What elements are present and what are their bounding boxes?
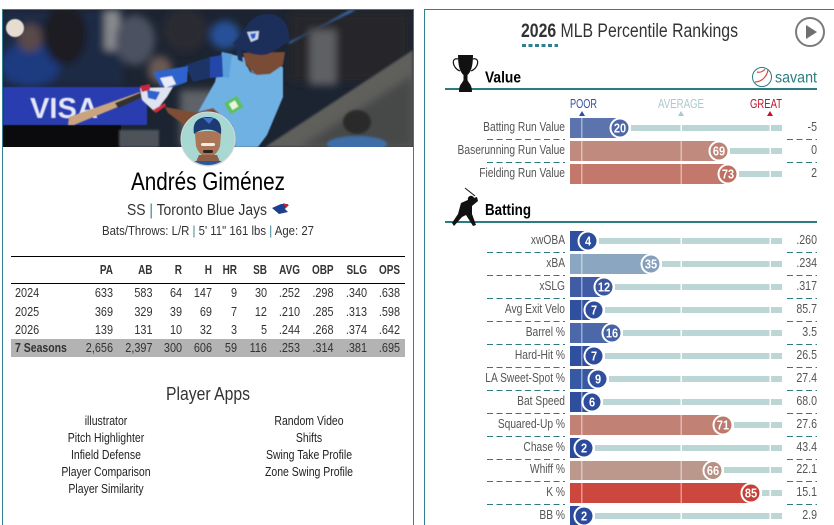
- row 2025: 69: [200, 305, 212, 319]
- savant logo: [752, 68, 817, 86]
- row 2025: 2025: [15, 305, 40, 319]
- player apps left links: illustrator: [85, 415, 127, 428]
- sign: [3, 125, 121, 147]
- row 2025: .285: [312, 305, 334, 319]
- row 2026: 32: [200, 323, 212, 337]
- row 7 seasons: [15, 341, 401, 355]
- row 2025: 12: [255, 305, 267, 319]
- row 7 seasons: .695: [379, 341, 401, 355]
- title dotted underline: [522, 44, 558, 47]
- rankings title: 2026 MLB Percentile Rankings: [521, 21, 738, 42]
- row: xwOBA: .260: [796, 233, 817, 247]
- head and helmet: [243, 52, 285, 75]
- row: Baserunning Run Value: Baserunning Run Value: [458, 144, 565, 157]
- row 2025: .313: [346, 305, 367, 319]
- row: Fielding Run Value: [479, 164, 817, 184]
- row: xSLG: .317: [796, 279, 817, 293]
- row: Fielding Run Value: 2: [811, 166, 817, 180]
- table header: R: [175, 264, 182, 277]
- row: K %: 15.1: [796, 485, 817, 499]
- row 2026: 3: [231, 323, 237, 337]
- ball: [6, 19, 24, 37]
- player apps left links: [61, 415, 151, 496]
- heading: value: Value: [485, 70, 521, 86]
- row: Barrel %: Barrel %: [526, 326, 565, 339]
- table header: SB: [253, 264, 267, 277]
- row 2025: [15, 305, 400, 319]
- row: Fielding Run Value: 73: [722, 168, 735, 182]
- row: xSLG: 12: [598, 281, 611, 295]
- row: Bat Speed: [517, 392, 817, 412]
- spectator lower right: [343, 110, 371, 134]
- row: Chase %: Chase %: [523, 441, 565, 454]
- row: Chase %: 43.4: [796, 440, 818, 454]
- row: Avg Exit Velo: 85.7: [796, 302, 817, 316]
- row: Squared-Up %: 71: [717, 419, 730, 433]
- row: Bat Speed: 68.0: [796, 394, 817, 408]
- row: xBA: xBA: [546, 257, 565, 270]
- row 2026: 10: [170, 323, 183, 337]
- row: Squared-Up %: Squared-Up %: [498, 418, 565, 431]
- table header: AVG: [279, 264, 300, 277]
- row 2024: 64: [170, 286, 183, 300]
- row: LA Sweet-Spot %: [485, 369, 818, 389]
- row 2024: 30: [255, 286, 268, 300]
- row: Bat Speed: Bat Speed: [517, 395, 565, 408]
- row: Batting Run Value: [483, 118, 817, 138]
- row: K %: 85: [745, 487, 758, 501]
- row 2025: .598: [379, 305, 400, 319]
- icon: play button: [796, 18, 824, 46]
- player apps left links: Player Comparison: [61, 466, 151, 479]
- row 2025: 7: [231, 305, 237, 319]
- panel: percentile rankings: [424, 10, 834, 525]
- row 2026: 139: [95, 323, 113, 337]
- panel: player card: [0, 5, 414, 525]
- player action photo: VISA: [30, 93, 98, 125]
- savant logo: savant: [775, 70, 817, 86]
- upper arm: [185, 57, 210, 82]
- row: Avg Exit Velo: [505, 300, 817, 320]
- heading: batting: Batting: [485, 202, 531, 219]
- row: BB %: BB %: [539, 509, 565, 522]
- row 7 seasons: .381: [346, 341, 367, 355]
- row 7 seasons: 116: [250, 341, 267, 355]
- player apps right links: Zone Swing Profile: [265, 466, 353, 479]
- forearm: [164, 106, 220, 125]
- row: Avg Exit Velo: 7: [591, 304, 598, 318]
- row 7 seasons: .253: [279, 341, 300, 355]
- stats table: [11, 256, 405, 357]
- row: Whiff %: 66: [707, 464, 720, 478]
- row 2024: 633: [95, 286, 113, 300]
- row: Baserunning Run Value: 69: [713, 145, 726, 159]
- row: Baserunning Run Value: [458, 141, 817, 161]
- row: xBA: [546, 254, 818, 274]
- row: Fielding Run Value: Fielding Run Value: [479, 167, 565, 180]
- row: Squared-Up %: [498, 415, 817, 435]
- row 2024: .638: [379, 286, 400, 300]
- scale legend: POOR: [570, 97, 597, 111]
- row 2024: 2024: [15, 286, 40, 300]
- player apps left links: Player Similarity: [68, 483, 144, 496]
- row: Batting Run Value: 20: [614, 122, 627, 136]
- icon: trophy: [453, 55, 478, 92]
- row: Hard-Hit %: [515, 346, 817, 366]
- stadium stairs: [265, 50, 413, 147]
- row: xwOBA: [531, 231, 817, 251]
- row 2026: .642: [379, 323, 400, 337]
- row: BB %: [539, 506, 817, 525]
- row 7 seasons: 59: [225, 341, 237, 355]
- gloves: [153, 66, 188, 87]
- row: xSLG: [539, 277, 817, 297]
- row 2024: 9: [231, 286, 237, 300]
- row: K %: [546, 483, 817, 503]
- row: K %: K %: [546, 486, 565, 499]
- scale legend: AVERAGE: [658, 97, 704, 111]
- row: Whiff %: Whiff %: [530, 463, 565, 476]
- value section header: [445, 55, 817, 92]
- batting section header: [445, 188, 817, 226]
- row: xBA: 35: [645, 258, 658, 272]
- row 2026: .244: [279, 323, 301, 337]
- row: Batting Run Value: Batting Run Value: [483, 121, 565, 134]
- row: Hard-Hit %: Hard-Hit %: [515, 349, 565, 362]
- row: Baserunning Run Value: 0: [811, 143, 817, 157]
- row: Hard-Hit %: 7: [591, 350, 598, 364]
- row: xSLG: xSLG: [539, 280, 565, 293]
- row: BB %: 2: [581, 510, 588, 524]
- row 2025: 39: [170, 305, 182, 319]
- row 2026: 2026: [15, 323, 39, 337]
- row: Batting Run Value: -5: [808, 120, 817, 134]
- row: Chase %: [523, 438, 818, 458]
- row 2024: .252: [279, 286, 300, 300]
- row: Hard-Hit %: 26.5: [796, 348, 817, 362]
- row 7 seasons: 2,656: [86, 341, 113, 355]
- player apps right links: Shifts: [296, 432, 322, 445]
- table header: [100, 264, 401, 277]
- row: Barrel %: 3.5: [802, 325, 817, 339]
- row: Barrel %: 16: [606, 327, 619, 341]
- row 7 seasons: 606: [194, 341, 212, 355]
- row 2026: .268: [312, 323, 333, 337]
- row: Avg Exit Velo: Avg Exit Velo: [505, 303, 565, 316]
- scale legend: GREAT: [750, 97, 782, 111]
- row: xwOBA: xwOBA: [531, 234, 565, 247]
- row: Barrel %: [526, 323, 817, 343]
- table header: AB: [138, 264, 152, 277]
- row 2024: .340: [346, 286, 368, 300]
- row 2024: 583: [134, 286, 153, 300]
- icon: blue jays logo: [272, 203, 289, 214]
- row 2024: .298: [312, 286, 333, 300]
- row 2025: 369: [95, 305, 113, 319]
- player apps left links: Infield Defense: [71, 449, 141, 462]
- row 7 seasons: 300: [164, 341, 183, 355]
- row: xwOBA: 4: [585, 235, 592, 249]
- player apps left links: Pitch Highlighter: [68, 432, 144, 445]
- row: Bat Speed: 6: [589, 396, 596, 410]
- row 2026: [15, 323, 400, 337]
- row: Squared-Up %: 27.6: [796, 417, 817, 431]
- player apps right links: [265, 415, 353, 479]
- player bio: Bats/Throws: L/R | 5' 11" 161 lbs | Age: 27: [102, 224, 314, 238]
- table header: OPS: [379, 264, 401, 277]
- row: BB %: 2.9: [802, 508, 817, 522]
- jersey: [198, 52, 283, 147]
- table header: H: [205, 264, 212, 277]
- row 2026: .374: [346, 323, 368, 337]
- row: xBA: .234: [796, 256, 818, 270]
- row 7 seasons: .314: [312, 341, 334, 355]
- row 7 seasons: 7 Seasons: [15, 342, 67, 355]
- table header: PA: [100, 264, 113, 277]
- scale legend: [570, 97, 782, 116]
- player apps right links: Random Video: [274, 415, 344, 428]
- row 7 seasons: 2,397: [125, 341, 153, 355]
- row: LA Sweet-Spot %: 27.4: [796, 371, 818, 385]
- player headshot: [181, 112, 235, 167]
- row: LA Sweet-Spot %: 9: [595, 373, 602, 387]
- table header: HR: [223, 264, 237, 277]
- row 2026: 5: [261, 323, 268, 337]
- row: Whiff %: 22.1: [796, 462, 817, 476]
- row: Chase %: 2: [581, 442, 588, 456]
- row 2025: 329: [134, 305, 153, 319]
- row 2025: .210: [279, 305, 301, 319]
- player action photo: [0, 5, 413, 152]
- row 2024: [15, 286, 400, 300]
- bat: [68, 92, 142, 125]
- table header: OBP: [312, 264, 334, 277]
- row: LA Sweet-Spot %: LA Sweet-Spot %: [485, 372, 565, 385]
- player name: Andrés Giménez: [131, 168, 285, 196]
- position and team: SS | Toronto Blue Jays: [127, 202, 267, 219]
- row: Whiff %: [530, 461, 817, 480]
- icon: batter silhouette: [452, 188, 478, 226]
- player apps right links: Swing Take Profile: [266, 449, 352, 462]
- row 2026: 131: [134, 323, 153, 337]
- row 2024: 147: [194, 286, 212, 300]
- table header: SLG: [347, 264, 367, 277]
- player apps heading: Player Apps: [166, 383, 250, 404]
